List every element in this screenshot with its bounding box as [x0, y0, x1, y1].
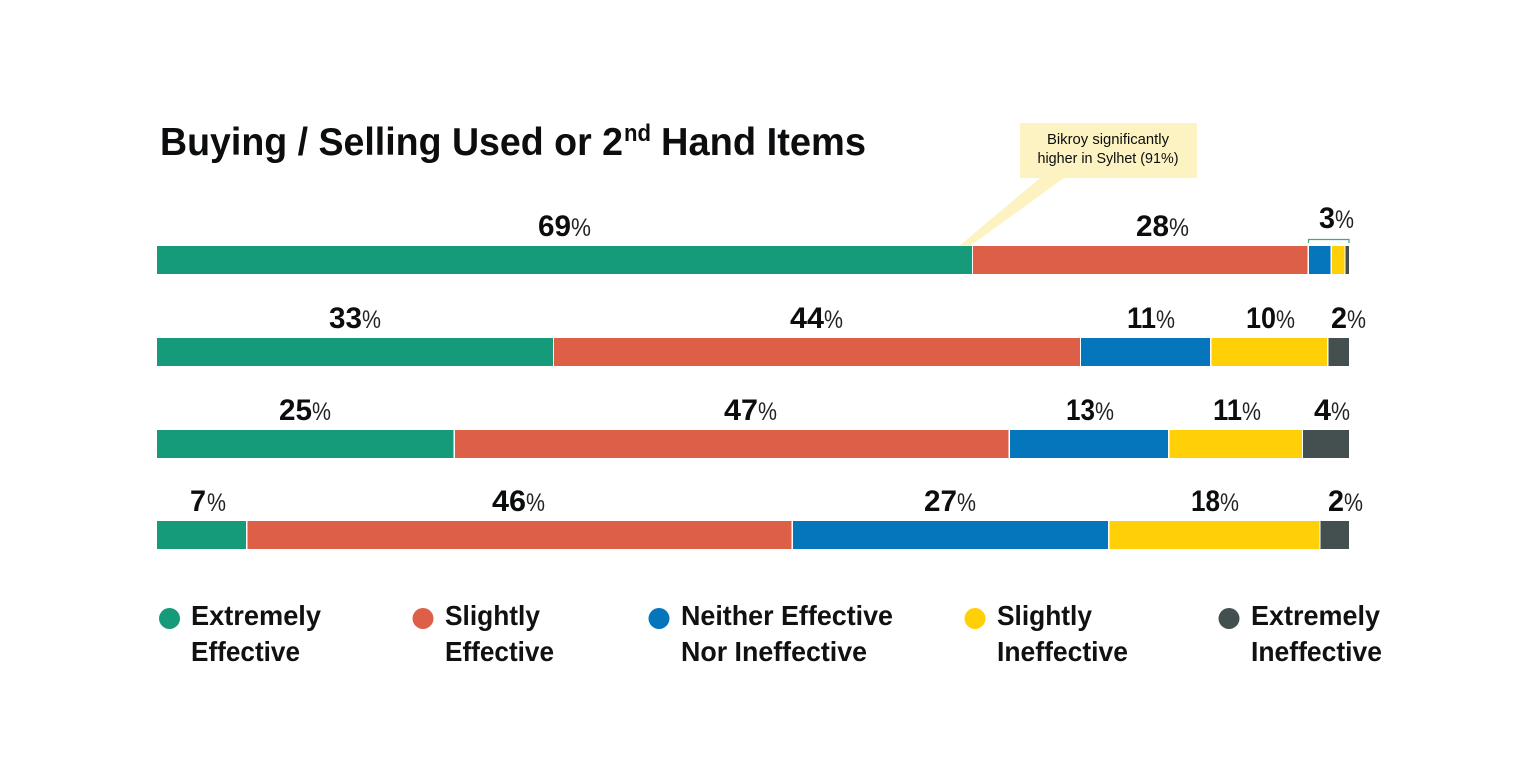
legend item: extremely effective: Effective [191, 636, 300, 667]
stacked bar: row 3 [157, 394, 1350, 458]
stacked bar: row 3: % [312, 398, 331, 426]
stacked bar: row 4: 18 [1191, 485, 1220, 518]
stacked bar: row 2: % [1156, 306, 1175, 334]
legend item: extremely effective [159, 600, 321, 667]
stacked bar: row 2: 2 [1331, 302, 1347, 335]
stacked bar: row 1: % [1335, 206, 1354, 234]
stacked bar: row 1: 28 [1136, 210, 1169, 243]
stacked bar: row 3: 25 [279, 394, 312, 427]
legend item: slightly effective [412, 600, 554, 667]
stacked bar: row 3: % [1331, 398, 1350, 426]
stacked bar: row 4: 27 [924, 485, 957, 518]
stacked bar: row 1: 3 [1319, 202, 1335, 235]
legend item: extremely effective: Extremely [191, 600, 321, 631]
stacked bar: row 3: 47 [724, 394, 758, 427]
stacked bar: row 1 [157, 202, 1354, 274]
stacked bar: row 2: % [824, 306, 843, 334]
legend item: slightly effective: Effective [445, 636, 554, 667]
stacked bar: row 2: % [1347, 306, 1366, 334]
callout: Bikroy significantly higher in Sylhet: higher in Sylhet (91%) [1038, 150, 1179, 167]
stacked bar: row 2: % [362, 306, 381, 334]
stacked bar: row 4: 2 [1328, 485, 1344, 518]
stacked bar: row 2: 44 [790, 302, 824, 335]
stacked bar: row 4: 7 [190, 485, 206, 518]
legend item: slightly ineffective: Slightly [997, 600, 1092, 631]
stacked bar: row 4 [157, 485, 1363, 549]
stacked bar: row 3: 11 [1213, 394, 1242, 427]
title: Buying / Selling Used or 2 [160, 121, 623, 164]
legend item: extremely ineffective: Ineffective [1251, 636, 1382, 667]
stacked bar: row 3: % [758, 398, 777, 426]
callout: Bikroy significantly higher in Sylhet: Bikroy significantly [1047, 131, 1169, 148]
title: nd [624, 120, 651, 147]
stacked bar: row 3: 13 [1066, 394, 1095, 427]
stacked bar: row 2: 11 [1127, 302, 1156, 335]
legend item: extremely ineffective: Extremely [1251, 600, 1380, 631]
stacked bar: row 2: % [1276, 306, 1295, 334]
bracket: 3% group [1308, 240, 1349, 243]
stacked bar: row 3: 4 [1314, 394, 1331, 427]
stacked bar: row 4: % [526, 489, 545, 517]
stacked bar: row 2: 33 [329, 302, 362, 335]
stacked bar: row 4: 46 [492, 485, 526, 518]
stacked bar: row 4: % [957, 489, 976, 517]
stacked bar: row 1: % [571, 214, 591, 242]
legend item: neither effective nor ineffective: Neither Effective [681, 600, 893, 631]
title: Hand Items [661, 121, 866, 164]
legend item: slightly effective: Slightly [445, 600, 540, 631]
title [160, 120, 866, 164]
callout: Bikroy significantly higher in Sylhet [959, 123, 1197, 246]
stacked bar: row 3: % [1095, 398, 1114, 426]
legend item: slightly ineffective: Ineffective [997, 636, 1128, 667]
stacked bar: row 4: % [1344, 489, 1363, 517]
legend item: slightly ineffective [964, 600, 1128, 667]
legend item: neither effective nor ineffective: Nor Ineffective [681, 636, 867, 667]
stacked bar: row 3: % [1242, 398, 1261, 426]
stacked bar: row 2: 10 [1246, 302, 1276, 335]
stacked bar: row 1: 69 [538, 210, 571, 243]
stacked bar: row 4: % [207, 489, 226, 517]
legend [159, 600, 1382, 667]
legend item: neither effective nor ineffective [648, 600, 893, 667]
stacked bar: row 4: % [1220, 489, 1239, 517]
stacked bar: row 1: % [1169, 214, 1189, 242]
legend item: extremely ineffective [1218, 600, 1382, 667]
stacked bar: row 2 [157, 302, 1366, 366]
